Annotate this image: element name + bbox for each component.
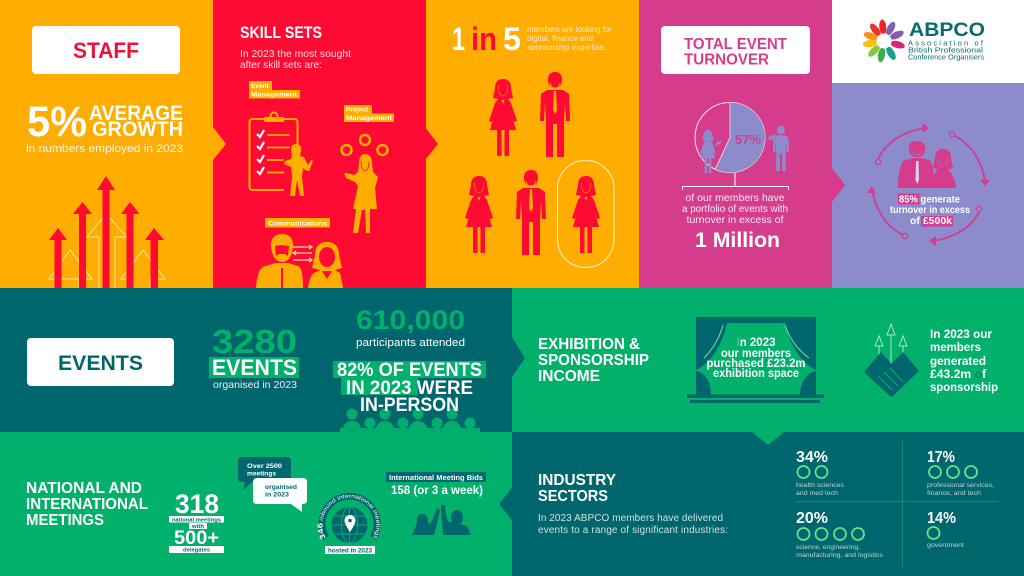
skill sets intro <box>240 48 351 71</box>
meetings heading: INTERNATIONAL <box>26 496 148 513</box>
sponsorship text: generated <box>930 354 986 368</box>
panel: 85 percent <box>832 83 1024 288</box>
turnover description: of our members have <box>685 192 785 204</box>
staff heading: STAFF <box>73 38 139 63</box>
exhibition heading <box>538 336 649 385</box>
sectors heading <box>538 472 616 505</box>
label: communications <box>265 218 330 228</box>
stat: 318 national meetings: 318 <box>175 489 219 519</box>
sponsorship text <box>930 327 998 394</box>
skill sets heading: SKILL SETS <box>240 24 322 42</box>
panel: industry sectors <box>512 432 1024 576</box>
stat: 1 in 5 <box>452 21 521 57</box>
icon: stage <box>687 317 824 403</box>
exhibition text: In 2023 <box>736 337 776 349</box>
label: event management: Event <box>251 83 270 90</box>
stat: 20 percent <box>796 510 884 559</box>
callout: 85 percent text: turnover in excess <box>890 205 970 216</box>
stat: 1 in 5: 5 <box>503 21 521 57</box>
arrow: events to exhibition <box>512 337 525 377</box>
stat: 610,000 participants <box>356 305 465 349</box>
icon: speech bubbles <box>238 457 307 512</box>
arrow: turnover to 85 percent <box>832 168 845 202</box>
sectors heading: SECTORS <box>538 488 608 505</box>
icon: two people <box>898 141 956 188</box>
stat: 20 percent: manufacturing, and logistics <box>796 552 884 559</box>
stat: 1 in 5: 1 <box>452 21 465 57</box>
sponsorship text: sponsorship <box>930 380 998 394</box>
meetings heading: MEETINGS <box>26 512 104 529</box>
sectors description: events to a range of significant industries: <box>538 525 728 536</box>
panel: national and international meetings <box>0 432 512 576</box>
one in five description <box>527 25 612 52</box>
icon: communicating people <box>256 234 343 288</box>
sectors description <box>538 513 728 536</box>
stat: 34 percent: 34% <box>796 449 828 466</box>
stat: 318 national meetings: with <box>191 524 205 530</box>
logo wordmark: Conference Organisers <box>908 52 984 62</box>
stat: 14 percent: government <box>927 542 964 549</box>
one in five description: members are looking for <box>527 25 612 34</box>
pie chart: 57 percent <box>695 102 789 173</box>
icon: juggling woman <box>342 135 388 233</box>
callout: 85 percent text: 85% generate <box>899 194 961 206</box>
icon: speech bubbles: organised <box>265 484 297 491</box>
turnover heading: TURNOVER <box>684 52 769 68</box>
panel: events <box>0 288 512 432</box>
skill sets intro: In 2023 the most sought <box>240 48 351 60</box>
one in five description: sponsorship expertise. <box>527 43 606 52</box>
pie chart: 57 percent: 57% <box>735 133 761 147</box>
exhibition heading: EXHIBITION & <box>538 336 640 353</box>
stat: 1 in 5: in <box>471 21 497 57</box>
stat: 1 million: 1 Million <box>695 229 780 252</box>
logo wordmark <box>908 19 985 62</box>
panel: staff <box>0 0 214 288</box>
stat: 34 percent <box>796 449 845 497</box>
callout: 85 percent text <box>890 194 970 227</box>
stat: 82 percent in person <box>333 360 486 416</box>
events heading: EVENTS <box>58 352 143 375</box>
panel: logo <box>832 0 1024 83</box>
stat: 82 percent in person: IN 2023 WERE <box>346 378 473 399</box>
icon: five people <box>465 72 614 268</box>
panel: total event turnover <box>639 0 832 288</box>
panel: exhibition and sponsorship <box>512 288 1024 432</box>
stat: 34 percent: health sciences <box>796 482 845 489</box>
sectors heading: INDUSTRY <box>538 472 616 489</box>
panel: skill sets <box>213 0 426 288</box>
stat: 318 national meetings: 500+ <box>174 528 219 549</box>
exhibition text: our members <box>721 348 791 360</box>
stat: 82 percent in person: IN-PERSON <box>360 395 459 416</box>
arrow: sectors to meetings <box>499 488 512 520</box>
turnover description: a portfolio of events with <box>682 203 788 215</box>
logo wordmark: ABPCO <box>909 19 985 41</box>
exhibition text: exhibition space <box>713 368 799 380</box>
one in five description: digital, finance and <box>527 34 593 43</box>
staff heading <box>32 26 180 74</box>
meetings heading <box>26 480 148 529</box>
growth stat: in numbers employed in 2023 <box>26 143 183 155</box>
growth stat: 5% <box>27 98 87 146</box>
sponsorship text: £43.2m of <box>930 367 987 381</box>
stat: 610,000 participants: 610,000 <box>356 305 465 335</box>
label: communications: Communications <box>268 220 327 228</box>
arrow: skills to one in five <box>425 127 438 160</box>
icon: growth arrows <box>49 176 165 288</box>
logo wordmark: Association of <box>908 38 984 48</box>
stat: 20 percent: science, engineering, <box>796 544 860 551</box>
stat: 3280 events: EVENTS <box>212 355 297 380</box>
sectors description: In 2023 ABPCO members have delivered <box>538 513 723 524</box>
turnover heading: TOTAL EVENT <box>684 36 788 53</box>
stat: 3280 events: organised in 2023 <box>213 379 297 391</box>
sponsorship text: members <box>930 340 981 354</box>
exhibition text: purchased £23.2m <box>706 358 806 370</box>
icon: speech bubbles: meetings <box>247 470 276 478</box>
label: project management: Project <box>346 106 369 114</box>
label: event management: Management <box>251 92 298 98</box>
stat: 3280 events: 3280 <box>212 323 297 360</box>
icon: globe badge: hosted in 2023 <box>328 548 373 554</box>
skill sets intro: after skill sets are: <box>240 59 322 71</box>
stat: 610,000 participants: participants attended <box>356 337 465 349</box>
logo wordmark: British Professional <box>908 46 983 54</box>
arrow: staff to skills <box>213 127 226 160</box>
icon: speech bubbles: in 2023 <box>265 492 289 498</box>
exhibition heading: INCOME <box>538 368 600 385</box>
panel: one in five <box>426 0 639 288</box>
stat: 17 percent: finance, and tech <box>927 490 981 497</box>
stat: 17 percent: professional services, <box>927 482 994 489</box>
sponsorship text: In 2023 our <box>930 327 992 341</box>
turnover description <box>682 192 788 226</box>
icon: globe badge: 346 inbound international meetings <box>317 494 380 540</box>
stat: international meeting bids <box>386 472 486 497</box>
stat: 14 percent: 14% <box>927 510 956 527</box>
icon: crowd <box>340 408 480 432</box>
icon: speech bubbles: Over 2500 <box>247 463 282 470</box>
callout: 85 percent text: of £500k <box>910 216 953 227</box>
turnover description: turnover in excess of <box>687 214 784 226</box>
growth stat <box>26 98 183 155</box>
icon: high five <box>412 505 471 535</box>
meetings heading: NATIONAL AND <box>26 480 142 497</box>
stat: 3280 events <box>209 323 299 391</box>
arrow: exhibition to sectors <box>752 432 784 445</box>
exhibition text <box>706 337 806 380</box>
stat: 17 percent <box>927 449 994 497</box>
bracket <box>682 173 788 190</box>
stat: international meeting bids: 158 (or 3 a week) <box>391 485 483 497</box>
stat: 17 percent: 17% <box>927 449 955 466</box>
stat: 20 percent: 20% <box>796 510 828 527</box>
icon: clipboard with person <box>250 112 313 196</box>
stat: 318 national meetings: delegates <box>183 548 210 554</box>
icon: handshake with arrows <box>864 324 919 397</box>
stat: 318 national meetings <box>169 489 224 554</box>
label: project management <box>344 105 394 122</box>
events heading <box>27 338 174 386</box>
stat: 318 national meetings: national meetings <box>172 518 221 524</box>
stat: 14 percent <box>927 510 964 549</box>
icon: logo hands <box>862 19 906 63</box>
turnover heading <box>661 26 810 74</box>
label: project management: Management <box>346 115 393 122</box>
growth stat: AVERAGE <box>89 102 183 125</box>
stat: 82 percent in person: 82% OF EVENTS <box>337 360 482 381</box>
exhibition heading: SPONSORSHIP <box>538 352 649 369</box>
icon: circular arrows <box>867 123 990 246</box>
growth stat: GROWTH <box>92 118 183 141</box>
stat: international meeting bids: International Meeting Bids <box>389 475 483 482</box>
stat: 34 percent: and med tech <box>796 490 838 497</box>
label: event management <box>249 81 300 98</box>
